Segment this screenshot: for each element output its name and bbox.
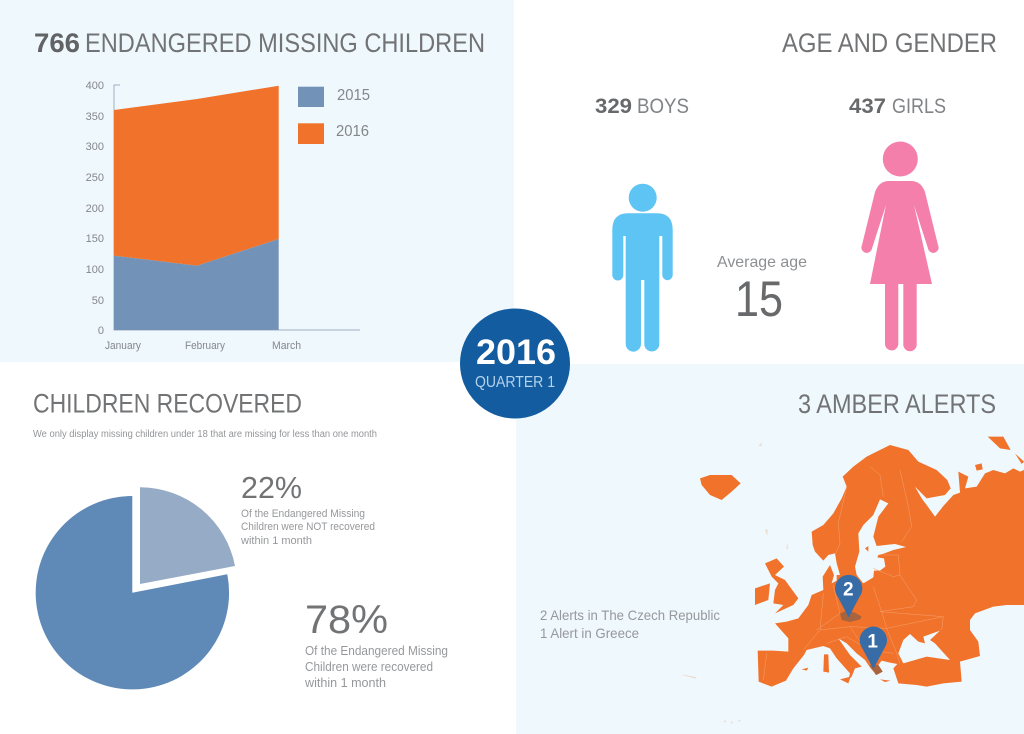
x axis labels: February — [185, 340, 225, 352]
callout: 78%: 78% — [305, 598, 388, 642]
slice: recovered 78% — [36, 496, 229, 689]
callout: 78% — [304, 598, 448, 690]
pin: 1 greece: 1 — [867, 631, 878, 652]
pin: 2 czech republic: 2 — [843, 579, 854, 600]
panel: children recovered — [33, 388, 448, 690]
alert list: 2 Alerts in The Czech Republic — [540, 607, 720, 623]
y axis labels: 0 — [98, 325, 104, 337]
legend: 2015 — [337, 87, 370, 104]
y axis labels: 50 — [92, 295, 104, 307]
alert list: 1 Alert in Greece — [540, 625, 639, 641]
area chart — [86, 80, 360, 352]
label: 329 boys: 329 — [595, 95, 632, 118]
heading: 3 amber alerts: 3 AMBER ALERTS — [798, 389, 996, 419]
callout: 22%: 22% — [241, 470, 302, 505]
panel: endangered missing children — [0, 0, 514, 362]
axes — [114, 85, 360, 330]
average age: 15 — [735, 271, 783, 327]
label: 437 girls: GIRLS — [892, 95, 946, 118]
label: 329 boys: BOYS — [637, 95, 689, 118]
y axis labels: 250 — [86, 172, 104, 184]
icon: boy — [612, 184, 673, 352]
map: europe — [683, 437, 1024, 724]
pin: 1 greece — [860, 627, 887, 669]
y axis labels — [86, 80, 104, 337]
legend: 2016 — [336, 123, 369, 140]
legend — [298, 87, 370, 144]
area: 2016 — [114, 86, 279, 266]
label: 437 girls — [849, 95, 946, 118]
alert list — [540, 607, 720, 641]
callout: 22%: within 1 month — [240, 535, 312, 547]
badge: 2016 quarter 1: QUARTER 1 — [475, 374, 555, 391]
country borders — [763, 467, 943, 680]
panel: age and gender — [595, 28, 997, 352]
callout: 22% — [240, 470, 375, 547]
x axis labels — [105, 340, 301, 352]
average age — [717, 254, 807, 327]
slice: not recovered 22% — [140, 487, 235, 584]
heading: age and gender: AGE AND GENDER — [782, 28, 997, 58]
heading: children recovered: CHILDREN RECOVERED — [33, 388, 302, 418]
average age: Average age — [717, 254, 807, 271]
callout: 22%: Of the Endangered Missing — [241, 508, 365, 520]
icon: girl — [861, 142, 939, 351]
x axis labels: January — [105, 340, 141, 352]
y axis labels: 150 — [86, 233, 104, 245]
highlight: greece — [869, 665, 883, 675]
label: 437 girls: 437 — [849, 95, 886, 118]
y axis labels: 300 — [86, 141, 104, 153]
y axis labels: 100 — [86, 264, 104, 276]
area: 2015 — [114, 239, 279, 330]
islands — [700, 437, 1024, 683]
pin: 2 czech republic — [835, 575, 862, 617]
badge: 2016 quarter 1 — [460, 308, 570, 418]
y axis labels: 200 — [86, 203, 104, 215]
y axis labels: 400 — [86, 80, 104, 92]
highlight: czech republic — [840, 611, 862, 622]
mainland — [758, 445, 1024, 687]
sea: baltic — [855, 499, 906, 583]
callout: 78%: within 1 month — [304, 676, 386, 690]
heading: 766 endangered missing children: 766 — [34, 28, 80, 58]
label: 329 boys — [595, 95, 689, 118]
note: data scope: We only display missing children under 18 that are missing for less than one month — [33, 429, 377, 440]
callout: 78%: Of the Endangered Missing — [305, 644, 448, 658]
x axis labels: March — [272, 340, 301, 352]
faint distant islands — [683, 443, 788, 724]
sea: black sea — [898, 631, 950, 663]
pie chart — [36, 487, 235, 689]
y axis labels: 350 — [86, 111, 104, 123]
callout: 78%: Children were recovered — [305, 660, 433, 674]
callout: 22%: Children were NOT recovered — [241, 521, 375, 533]
heading: 766 endangered missing children: ENDANGERED MISSING CHILDREN — [85, 28, 485, 58]
badge: 2016 quarter 1: 2016 — [476, 333, 556, 372]
panel: amber alerts — [516, 364, 1024, 734]
